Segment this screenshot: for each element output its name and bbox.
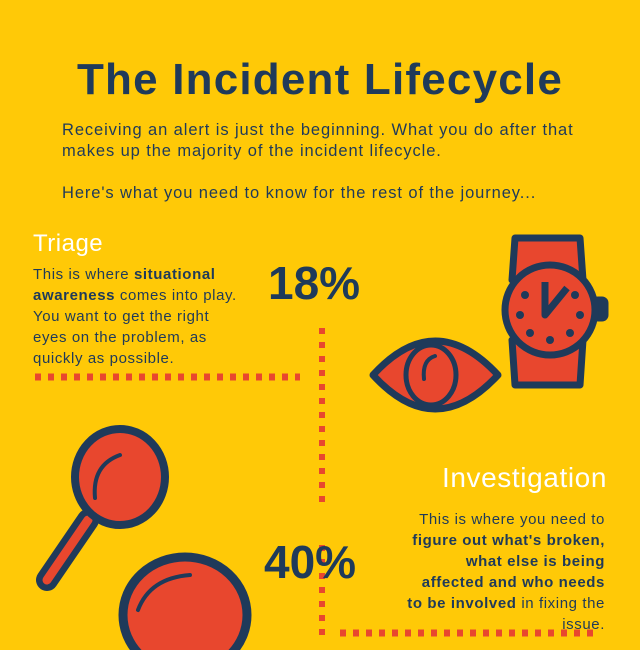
text: investigation: what else is being <box>466 553 605 570</box>
heading: triage: Triage <box>33 230 103 257</box>
text: triage: eyes on the problem, as <box>33 329 207 346</box>
intro text: Receiving an alert is just the beginning. What you do after that <box>62 121 574 139</box>
stat 40%: 40% <box>264 536 356 588</box>
stat 18%: 18% <box>268 257 360 309</box>
icon: watch <box>502 234 608 388</box>
icon: magnifier <box>36 425 169 591</box>
intro text: makes up the majority of the incident lifecycle. <box>62 142 442 160</box>
text: triage: This is where situational <box>33 266 216 283</box>
text: investigation <box>407 511 605 633</box>
text: triage: awareness comes into play. <box>33 287 237 304</box>
text: investigation: figure out what's broken, <box>412 532 605 549</box>
text: triage: quickly as possible. <box>33 350 174 367</box>
title: The Incident Lifecycle <box>77 55 563 104</box>
text: investigation: This is where you need to <box>419 511 605 528</box>
text: triage <box>33 266 237 367</box>
text: investigation: affected and who needs <box>422 574 605 591</box>
text: investigation: issue. <box>562 616 605 633</box>
intro text <box>62 121 574 202</box>
text: investigation: to be involved in fixing the <box>407 595 605 612</box>
intro text: Here's what you need to know for the rest of the journey... <box>62 184 536 202</box>
text: triage: You want to get the right <box>33 308 209 325</box>
icon: eye <box>370 338 502 412</box>
icon: magnifier lens bottom <box>118 552 252 650</box>
heading: investigation: Investigation <box>442 462 607 493</box>
